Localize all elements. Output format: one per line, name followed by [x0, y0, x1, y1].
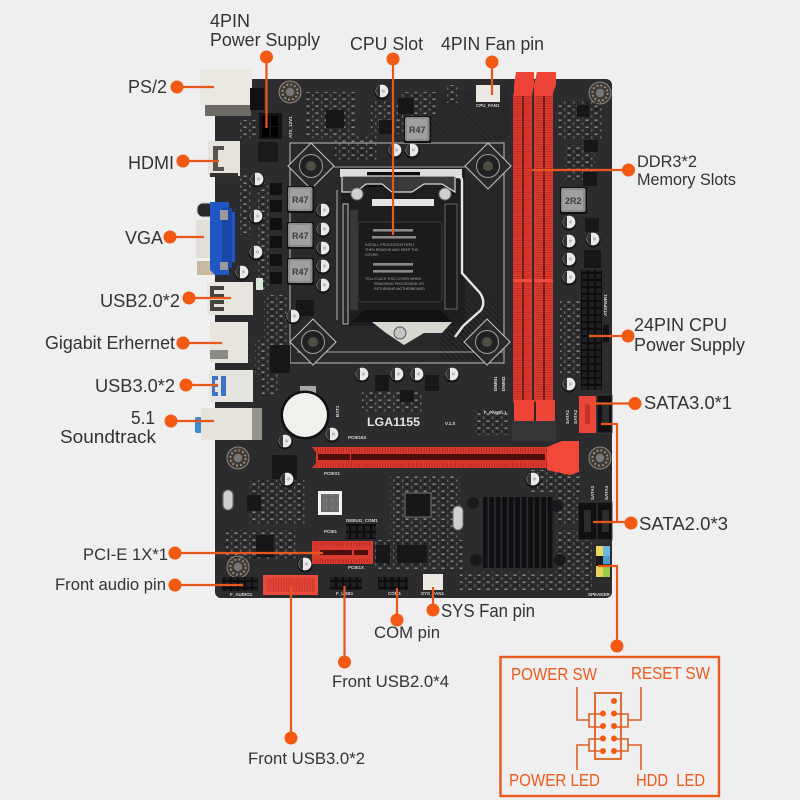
front panel pinout box: [500, 657, 719, 796]
front audio callout: [168, 578, 243, 592]
inductors: 2R2: [565, 196, 582, 206]
Gigabit callout: [176, 336, 222, 350]
soundtrack callout: [164, 414, 214, 428]
inductors: R47: [409, 125, 426, 135]
debug header: [346, 524, 376, 539]
silkscreen labels: ATXPWR1: [603, 294, 608, 316]
HDMI callout: [176, 154, 219, 168]
label: DDR3 memory slots: DDR3*2: [637, 152, 697, 171]
24PIN callout: [589, 330, 634, 342]
24PIN connector: [581, 270, 609, 390]
motherboard: [195, 69, 612, 598]
SATA3 callout: [589, 397, 642, 410]
label: 5.1 soundtrack: [60, 407, 157, 447]
PCI-E x16 slot: [312, 441, 579, 475]
inductors: [287, 116, 587, 285]
socket load plate: [340, 169, 462, 177]
audio port: [195, 408, 262, 440]
label: USB3.0: USB3.0*2: [95, 375, 175, 396]
label: SYS fan pin: SYS Fan pin: [441, 600, 535, 621]
silkscreen labels: PCIE1: [324, 529, 338, 534]
PCI-E x1 slot: [312, 541, 373, 564]
4PIN power connector: [258, 113, 282, 162]
mounting holes: [227, 81, 611, 578]
VGA callout: [164, 230, 204, 244]
silkscreen labels: F_AUDIO1: [230, 592, 253, 597]
silkscreen labels: ATX_12V1: [288, 116, 293, 138]
front panel pins: [596, 546, 610, 577]
front USB2 header: [330, 577, 362, 590]
silkscreen labels: DIMM2: [501, 376, 506, 391]
silkscreen labels: DEBUG_COM1: [346, 518, 378, 523]
CPU fan callout: [486, 56, 498, 95]
POWER SW label: POWER SW: [511, 664, 597, 684]
front USB3 header: [263, 575, 318, 595]
slot 1: [513, 94, 532, 402]
label: USB2.0: USB2.0*2: [100, 290, 180, 311]
label: SATA2.0: SATA2.0*3: [639, 513, 728, 534]
silkscreen labels: SATA3: [590, 485, 595, 500]
MOSFET column: [270, 183, 282, 284]
label: front USB2.0: Front USB2.0*4: [332, 672, 449, 691]
inductors: R47: [292, 231, 309, 241]
silkscreen labels: F_PANEL1: [484, 410, 507, 415]
cover text: [365, 229, 425, 291]
RESET SW label: RESET SW: [631, 663, 710, 683]
USB3.0 port: [209, 370, 253, 402]
label: 4PIN fan pin: 4PIN Fan pin: [441, 33, 544, 54]
CPU slot callout: [386, 52, 400, 235]
label: 24PIN CPU power supply: 24PIN CPU: [634, 314, 727, 335]
silkscreen labels: PCIE16X: [348, 435, 367, 440]
front USB2 callout: [338, 586, 351, 668]
label: PCI-E 1X: PCI-E 1X*1: [83, 545, 168, 564]
SYS fan callout: [426, 587, 440, 616]
callout lines: [164, 50, 642, 744]
POWER LED label: POWER LED: [509, 770, 600, 790]
silkscreen labels: PCIE1X: [348, 565, 364, 570]
CPU socket: [340, 168, 483, 345]
label: 4PIN power supply: [210, 10, 321, 50]
COM header: [378, 577, 408, 590]
inductors: R47: [292, 267, 309, 277]
silkscreen labels: COM1: [388, 591, 401, 596]
DDR3 callout: [532, 164, 635, 176]
front USB3 callout: [284, 586, 298, 744]
PS/2 port: [200, 69, 264, 116]
ICs: [247, 98, 601, 563]
label: SATA3.0: SATA3.0*1: [644, 392, 732, 413]
silkscreen labels: SATA1: [565, 409, 570, 424]
CPU fan connector: [476, 85, 500, 102]
battery: [280, 386, 330, 440]
USB3.0 callout: [180, 378, 218, 392]
crystals: [223, 490, 463, 530]
silkscreen labels: BAT1: [335, 405, 340, 417]
front audio header: [222, 577, 258, 591]
silkscreen labels: SPEAKER: [588, 592, 611, 597]
cover text: INSTALL PROCESSOR FIRST: [365, 243, 415, 247]
4PIN power callout: [260, 50, 273, 128]
SATA2 callout: [593, 424, 638, 530]
board PCB: [215, 79, 612, 598]
PCI-E latch: [547, 441, 579, 475]
top clips: [514, 72, 534, 96]
silkscreen labels: V.1.0: [445, 421, 456, 426]
RAM slots: [512, 72, 556, 441]
silkscreen labels: PCIEX1: [324, 471, 341, 476]
inductors: R47: [292, 195, 309, 205]
capacitors: [234, 84, 601, 573]
silkscreen labels: DIMM1: [493, 376, 498, 391]
USB2.0 port: [207, 278, 263, 315]
VGA port: [196, 202, 235, 275]
front panel callout: [598, 566, 624, 652]
label: 24PIN CPU power supply: [634, 314, 746, 355]
label: gigabit ethernet: Gigabit Erhernet: [45, 332, 175, 353]
right labels: [634, 152, 746, 534]
HDMI port: [208, 141, 240, 177]
label: HDMI: HDMI: [128, 152, 174, 173]
USB2.0 callout: [182, 292, 231, 304]
cover text: THEN REMOVE AND KEEP THE: [365, 248, 419, 252]
CPU area frame: [288, 90, 511, 365]
label: 24PIN CPU power supply: Power Supply: [634, 334, 746, 355]
PCI-E x1 callout: [168, 546, 323, 560]
HDD LED label: HDD LED: [636, 770, 705, 790]
left and top labels: [45, 10, 544, 768]
label: DDR3 memory slots: [637, 152, 736, 189]
cover text: REMOVING PROCESSOR OR: [374, 282, 424, 286]
label: VGA: VGA: [125, 227, 164, 248]
label: front USB3.0: Front USB3.0*2: [248, 749, 365, 768]
silkscreen labels: SATA2: [573, 409, 578, 424]
bottom clips: [514, 400, 534, 421]
label: 4PIN power supply: 4PIN: [210, 10, 250, 31]
label: CPU slot: CPU Slot: [350, 33, 423, 54]
label: front audio pin: Front audio pin: [55, 575, 166, 594]
label: PS/2: PS/2: [128, 76, 167, 97]
pin header diagram: [577, 687, 641, 770]
label: COM pin: COM pin: [374, 623, 440, 642]
socket bottom clips: [352, 310, 452, 322]
slot 2: [534, 94, 553, 402]
PS/2 callout: [170, 80, 214, 94]
label: 4PIN power supply: Power Supply: [210, 29, 321, 50]
silkscreen labels: [230, 103, 611, 597]
label: 5.1 soundtrack: Soundtrack: [60, 426, 157, 447]
cover text: RETURNING MOTHERBOARD: [374, 287, 425, 291]
cover text: COVER: [365, 253, 378, 257]
label: 5.1 soundtrack: 5.1: [131, 407, 155, 428]
SATA3 ports: [579, 395, 612, 433]
silkscreen labels: LGA1155: [367, 415, 420, 429]
SYS fan connector: [423, 574, 443, 590]
SATA2 ports: [578, 502, 612, 540]
Gigabit Ethernet port: [210, 322, 248, 363]
small SMD components: [226, 85, 603, 590]
silkscreen labels: SATA4: [604, 485, 609, 500]
silkscreen labels: F_USB1: [336, 591, 354, 596]
QR sticker: [318, 491, 342, 515]
silkscreen labels: CPU_FAN1: [476, 103, 500, 108]
heatsink: [467, 497, 566, 568]
cover text: TELL PLACE THIS COVER WHEN: [365, 277, 422, 281]
silkscreen labels: SYS_FAN1: [421, 591, 445, 596]
socket lever: [455, 177, 483, 337]
socket cover: [358, 222, 442, 302]
COM callout: [390, 588, 404, 626]
label: DDR3 memory slots: Memory Slots: [637, 170, 736, 189]
